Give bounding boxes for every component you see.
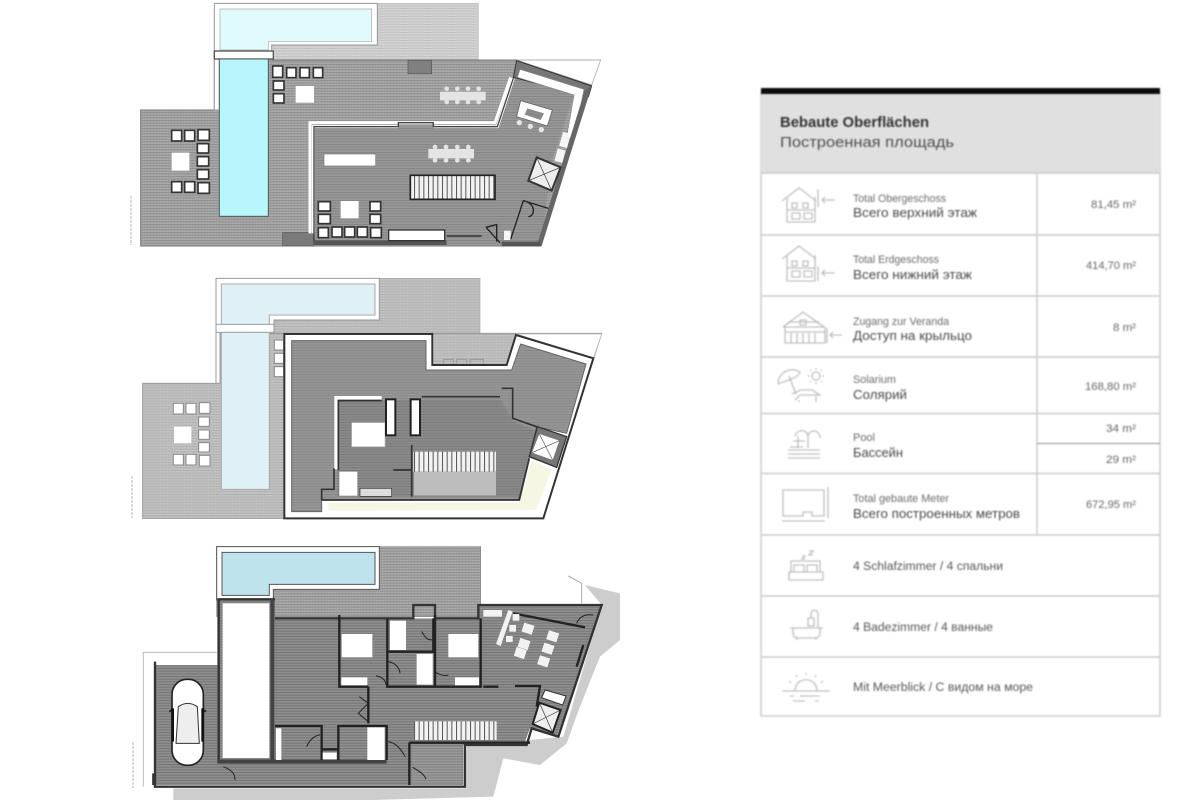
void white block	[223, 603, 269, 758]
stair void	[414, 472, 496, 495]
main terrace	[141, 60, 592, 246]
kitchen island	[517, 101, 552, 132]
lift shaft	[529, 427, 567, 467]
row: bathrooms	[790, 610, 993, 640]
terrace lounge set	[173, 403, 210, 466]
car	[169, 679, 206, 765]
cream planter	[328, 460, 552, 511]
lift shaft	[528, 157, 561, 191]
entry cabinets	[504, 132, 571, 240]
bed	[352, 423, 385, 447]
building interior	[313, 77, 574, 246]
area table panel	[761, 88, 1160, 716]
beds	[341, 634, 479, 685]
pool	[221, 284, 375, 489]
main pool	[219, 59, 268, 216]
dining tables	[428, 86, 486, 163]
row: bedrooms	[789, 551, 1003, 580]
floor plan: ground floor	[143, 547, 620, 800]
white plot corner	[517, 334, 602, 358]
row: total built: 672,95 m²	[1086, 499, 1136, 511]
row: sea view: Mit Meerblick / С видом на море	[853, 682, 1033, 694]
side loungers	[274, 340, 284, 377]
upper terrace strip	[216, 278, 480, 335]
icon: floor plan outline	[782, 487, 828, 521]
pool	[222, 552, 375, 595]
icon: house with lower floor arrow	[782, 246, 835, 281]
bathroom	[339, 472, 392, 496]
white inner lining	[336, 398, 382, 469]
building walls	[310, 77, 513, 233]
row: total built	[782, 487, 1136, 521]
row: upper floor	[782, 188, 1136, 222]
row: solarium: Солярий	[853, 388, 907, 402]
row: ground floor	[782, 246, 1136, 282]
bottom wall	[313, 243, 541, 244]
row: ground floor: Всего нижний этаж	[853, 268, 973, 282]
indoor sofa seats	[318, 202, 381, 238]
roof slab	[284, 334, 593, 518]
row: pool: Pool	[853, 432, 875, 444]
floor plan: upper floor with terrace and pool	[141, 3, 601, 246]
row: bedrooms: 4 Schlafzimmer / 4 спальни	[853, 561, 1003, 573]
table rules	[761, 173, 1160, 657]
icon: house with upper floor arrow	[782, 188, 835, 222]
kitchen counter	[517, 69, 584, 140]
row: veranda access: Zugang zur Veranda	[853, 316, 950, 328]
floor plan: terrace level	[143, 278, 602, 518]
long sideboard	[389, 230, 445, 241]
bathroom fittings	[276, 621, 433, 760]
roof terrace surface	[292, 341, 586, 512]
upper terrace strip	[214, 3, 478, 61]
door swings	[223, 615, 593, 780]
corner block	[283, 233, 313, 246]
path boundary	[568, 576, 582, 603]
outer walls	[153, 599, 602, 787]
icon: sun over sea	[782, 673, 830, 701]
lift shaft	[533, 690, 566, 733]
row: veranda access: 8 m²	[1113, 322, 1136, 334]
row: sea view	[782, 673, 1033, 701]
row: solarium: Solarium	[853, 374, 896, 386]
terrace lounge chairs	[273, 66, 323, 103]
interior core	[337, 398, 535, 497]
row: upper floor: Всего верхний этаж	[853, 206, 978, 220]
icon: parasol, sun and lounger	[778, 368, 824, 402]
pool value divider	[1037, 442, 1160, 444]
main floor area	[156, 599, 602, 785]
row: veranda access: Доступ на крыльцо	[853, 329, 972, 343]
carport plot outline	[143, 652, 217, 787]
drawing scale marks	[131, 196, 133, 788]
table header	[761, 88, 1160, 173]
table header: Построенная площадь	[780, 134, 954, 151]
table frame	[761, 92, 1160, 716]
bedroom walls	[275, 613, 585, 785]
row: upper floor: Total Obergeschoss	[853, 193, 946, 205]
staircase	[410, 175, 495, 199]
indoor bench	[324, 154, 376, 166]
pool coping	[216, 278, 379, 383]
upper pool arm	[220, 9, 372, 50]
void wall	[217, 599, 387, 762]
chimney block	[408, 60, 432, 74]
pool bridge	[214, 51, 273, 59]
wardrobes	[386, 399, 420, 435]
east wall	[537, 85, 592, 246]
row: pool: 34 m²	[1106, 423, 1136, 435]
balcony chairs	[443, 359, 483, 363]
icon: bed	[789, 551, 823, 580]
row: ground floor: Total Erdgeschoss	[853, 254, 939, 266]
row: pool: 29 m²	[1106, 454, 1136, 466]
wall outline	[314, 78, 513, 242]
lounge tables	[172, 86, 359, 218]
surrounding rock	[173, 585, 620, 800]
icon: villa with veranda arrow	[783, 312, 842, 343]
row: pool	[788, 423, 1136, 466]
entrance room	[447, 201, 548, 243]
row: veranda access	[783, 312, 1136, 343]
pool coping	[217, 547, 379, 600]
pool coping	[214, 3, 377, 110]
outer terrace	[143, 333, 602, 518]
outdoor lounge chairs	[172, 130, 209, 193]
dining group	[483, 610, 559, 667]
row: solarium: 168,80 m²	[1085, 381, 1136, 393]
pool bridge	[216, 324, 274, 332]
row: total built: Всего построенных метров	[853, 507, 1020, 521]
kitchen counter walls	[513, 61, 592, 97]
staircase	[413, 452, 496, 472]
table header: Bebaute Oberflächen	[780, 114, 929, 131]
row: upper floor: 81,45 m²	[1091, 199, 1136, 211]
row: total built: Total gebaute Meter	[853, 493, 949, 505]
white corner outside the building	[517, 60, 601, 85]
row: ground floor: 414,70 m²	[1086, 260, 1136, 272]
row: pool: Бассейн	[853, 446, 903, 460]
balcony recess	[433, 335, 514, 364]
icon: pool with palm	[788, 431, 820, 458]
interior walls	[322, 388, 537, 500]
lower garage corner	[412, 747, 462, 784]
staircase	[414, 721, 497, 740]
row: bathrooms: 4 Badezimmer / 4 ванные	[853, 622, 993, 634]
row: solarium	[778, 368, 1136, 402]
pool deck tile	[217, 547, 481, 617]
icon: bathtub	[790, 610, 823, 640]
